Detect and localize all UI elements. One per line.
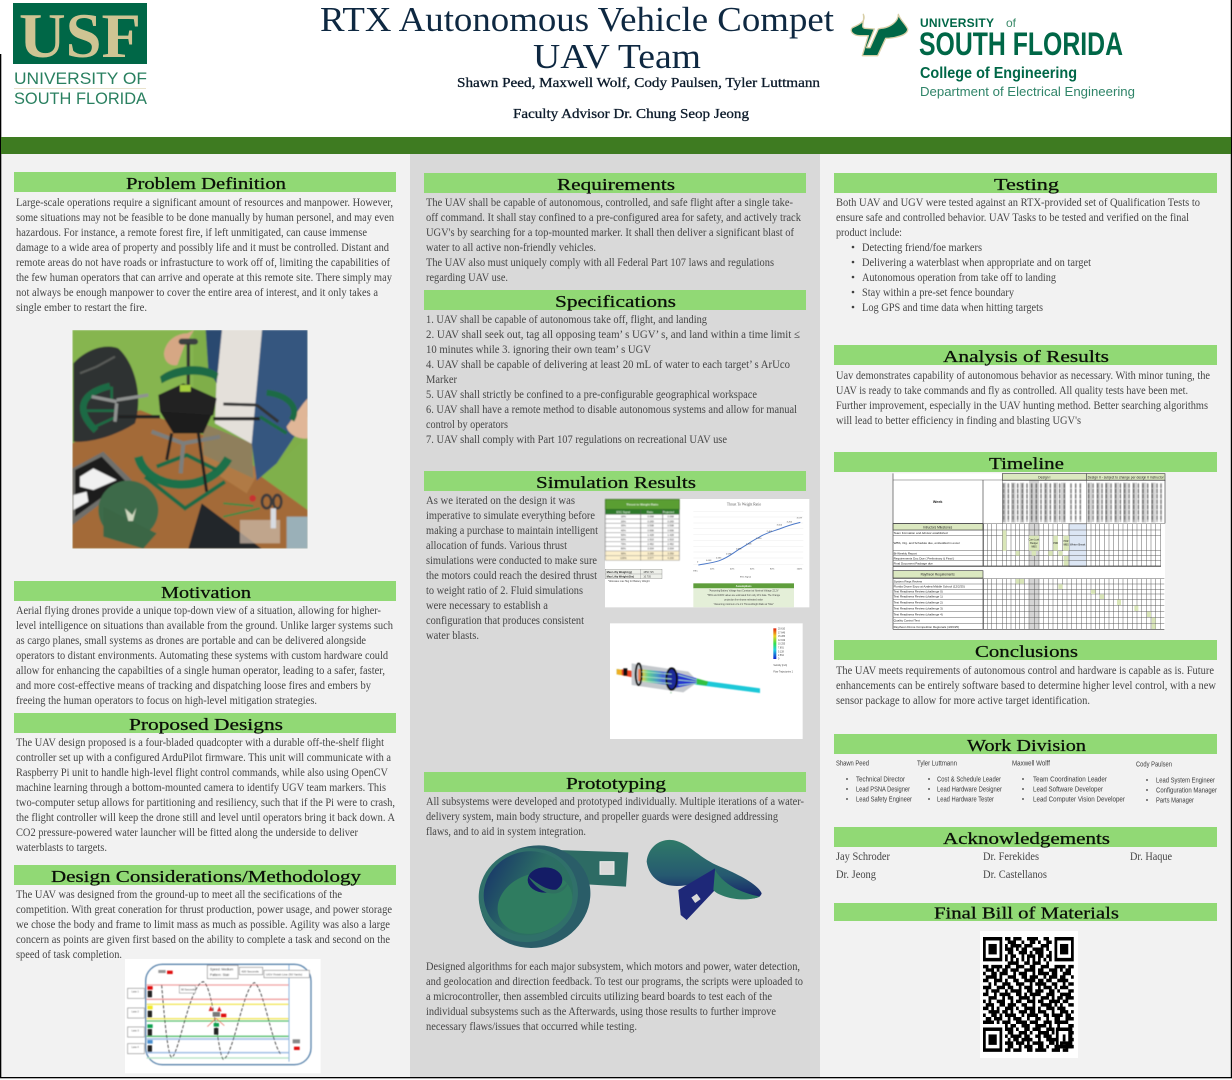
photo: quadcopter on table [72, 330, 308, 549]
table: thrust to weight: 3.577 [648, 557, 654, 560]
testing bullet list: Detecting friend/foe markers [862, 242, 982, 254]
panel: conclusions: sensor package to allow for more active target identification. [836, 695, 1090, 707]
testing bullet list [852, 242, 1092, 314]
QR code [980, 931, 1078, 1058]
line chart: 80% [770, 568, 774, 570]
max lift table: 4856.725 [643, 571, 654, 574]
panel: simulation results: As we iterated on the design it was [426, 495, 575, 507]
line chart: 3.265 [787, 522, 793, 524]
team member: Cody Paulsen: Parts Manager [1156, 798, 1195, 804]
panel: proposed designs: waterblasts to targets. [16, 842, 107, 854]
gantt grid lines [893, 473, 1165, 629]
panel: simulation results: Simulation Results [536, 473, 696, 492]
max lift table [605, 569, 662, 583]
assumptions box: *Assuming Battery Voltage kept Constant at Nominal Voltage 22.2V [709, 590, 779, 593]
figure: CFD flow simulation [610, 623, 803, 739]
diagram: competition lanes and flight path: 90 Seconds [181, 987, 196, 991]
panel: analysis of results: UAV is ready to take commands and fly as controlled. All quality tests have been met. [836, 385, 1188, 397]
text: development process: and geolocation and direction feedback. To test our programs, the scripts were uploaded to [426, 976, 803, 988]
gantt milestones: Test Readiness Review (challenge 3) [894, 607, 943, 611]
panel: proposed designs [14, 713, 396, 854]
panel: problem definition: the few human operators that can arrive and operate at this remote site. There simply may [16, 272, 392, 284]
table: thrust to weight: 80% [621, 548, 627, 551]
table: thrust to weight: 0.996 [648, 529, 654, 532]
team member: Shawn Peed: Lead Safety Engineer [856, 796, 913, 804]
line chart: 40% [730, 568, 734, 570]
panel: proposed designs: two-computer setup allows for partitioning and resiliency, such that if the Pi were to crash, [16, 797, 395, 809]
team member: Shawn Peed [836, 760, 913, 804]
panel: specifications: 6. UAV shall have a remote method to disable autonomous systems and allow for manual [426, 404, 797, 416]
panel: requirements: off command. It shall stay confined to a pre-configured area for safety, and actively track [426, 212, 801, 224]
line chart: 0 [697, 561, 699, 563]
panel: problem definition [14, 172, 396, 314]
table: thrust to weight: 100% [620, 557, 627, 560]
table: thrust to weight: 2.462 [668, 543, 674, 546]
green header band [1, 137, 1231, 154]
gantt milestones: Requirements Doc Due ( Preliminary & Final ) [894, 556, 954, 560]
panel: proposed designs: CO2 pressure-powered water launcher will be fitted along the underside to deliver [16, 827, 358, 839]
panel: acknowledgements: Jay Schroder [836, 851, 890, 863]
max lift table: Max Lifty Weight (g) [607, 570, 632, 574]
panel: acknowledgements: Acknowledgements [943, 829, 1110, 848]
diagram: competition lanes and flight path: Lane 3 [132, 1030, 139, 1032]
gantt milestones: System Reqs Review [894, 579, 923, 583]
panel: proposed designs: the flight controller will keep the drone still and level until operators bring it back down. A [16, 812, 396, 824]
figure: CAD models of water blaster [465, 830, 762, 963]
assumptions box: Assumptions [736, 585, 752, 588]
panel: specifications: control by operators [426, 419, 508, 431]
gantt milestones: Team Formation and Advisor established [894, 531, 948, 535]
team member: Maxwell Wolff: Lead Computer Vision Developer [1033, 796, 1126, 804]
authors: Shawn Peed, Maxwell Wolf, Cody Paulsen, Tyler Luttmann [457, 75, 820, 90]
table: thrust to weight: 1.910 [648, 539, 654, 542]
gantt milestones: Intructors Milestones [923, 525, 953, 529]
panel: analysis of results: will lead to better efficiency in finding and blasting UGV's [836, 415, 1081, 427]
gantt milestones: Test Readiness Review (challenge 2) [894, 601, 943, 605]
team member: Maxwell Wolff: Team Coordination Leader [1033, 776, 1108, 784]
panel: simulation results: configuration that produces consistent [426, 615, 585, 627]
gantt design headers: Design II - subject to change per design II instructor [1088, 475, 1165, 479]
diagram: competition lanes and flight path: Lane 2 [132, 1011, 139, 1013]
panel: work division: Work Division [967, 736, 1087, 755]
gantt milestones: WBS [1063, 544, 1069, 546]
table: thrust to weight: 3.350 [668, 552, 674, 555]
panel: analysis of results [834, 345, 1217, 427]
team member: Tyler Luttmann: Cost & Schedule Leader [937, 776, 1002, 784]
table: thrust to weight: Ratio [647, 510, 654, 514]
panel: proposed designs: Proposed Designs [129, 715, 283, 734]
panel: prototyping: flaws, and to aid in system integration. [426, 826, 586, 838]
panel: design considerations: speed of task completion. [16, 949, 122, 961]
panel: specifications: 4. UAV shall be capable of delivering at least 20 mL of water to each target’ s ArUco [426, 359, 790, 371]
table: thrust to weight: 3.004 [668, 548, 674, 551]
panel: requirements: Requirements [557, 175, 675, 194]
table: thrust to weight: 70% [621, 543, 627, 546]
team member: Tyler Luttmann: Lead Hardware Tester [937, 796, 995, 804]
line chart: 3.004 [777, 525, 783, 527]
table: thrust to weight: 30% [621, 525, 627, 528]
team member: Cody Paulsen [1136, 762, 1218, 804]
panel: requirements [424, 173, 806, 284]
panel: prototyping: delivery system, main body structure, and propeller guards were designed addressing [426, 811, 778, 823]
panel: acknowledgements: Dr. Haque [1130, 851, 1172, 863]
panel: simulation results: making a purchase to maintain intelligent [426, 525, 599, 537]
assumptions box: *80% and 100% values are estimated from only 21V data. The Orange [707, 594, 781, 597]
colour scale legend: 17.646 [778, 632, 786, 634]
table: thrust to weight: 0.996 [668, 529, 674, 532]
table: thrust to weight: 10% [621, 516, 627, 519]
line chart: 1.910 [756, 538, 762, 540]
panel: design considerations [14, 865, 396, 961]
logo: USF College of Engineering: UNIVERSITY [920, 16, 994, 30]
table: thrust to weight: 0.068 [668, 516, 674, 519]
panel: timeline heading [834, 452, 1217, 473]
diagram: competition lanes and flight path: Speed: Medium [210, 968, 234, 972]
colour scale legend: 12.919 [778, 640, 786, 642]
table: thrust to weight: 40% [621, 529, 627, 532]
panel: testing: ensure safe and controlled behavior. UAV Tasks to be tested and verified on the final [836, 212, 1189, 224]
team member: Maxwell Wolff: Maxwell Wolff [1012, 760, 1050, 768]
panel: requirements: UGV's by searching for a top-mounted marker. It shall then deliver a significant blast of [426, 227, 794, 239]
panel: motivation: and more cost-effective means of tracking and dispatching loose fires and embers by [16, 680, 371, 692]
line chart: Thrust To Weight Ratio [727, 503, 761, 507]
line chart: 0.996 [736, 549, 742, 551]
panel: testing: Testing [994, 175, 1060, 194]
panel: design considerations: we chose the body and frame to limit mass as much as possible. Agility was also a large [16, 919, 390, 931]
table: thrust to weight: 4.200 [668, 557, 674, 560]
colour scale legend [773, 628, 794, 674]
panel: problem definition: damage to a wide area of property and possibly life and it must be controlled. Distant and [16, 242, 389, 254]
gantt milestones: Budget [1030, 542, 1038, 545]
table: thrust to weight: 1.910 [668, 539, 674, 542]
nozzle model [647, 840, 762, 920]
panel: motivation: as cargo planes, small systems as drones are portable and can be delivered alongside [16, 635, 366, 647]
gantt design headers: Design I [1038, 476, 1051, 480]
panel: motivation: allow for enhancing the capabilties of a single human operator, leading to a safer, faster, [16, 665, 385, 677]
panel: conclusions: Conclusions [975, 642, 1078, 661]
water bowl model [465, 830, 628, 963]
line chart: 0.265 [716, 558, 722, 560]
panel: specifications: Specifications [555, 292, 676, 311]
colour scale legend: 2.564 [778, 655, 785, 657]
gantt milestones: WBS [1031, 546, 1037, 548]
logo: bull icon [851, 14, 908, 56]
diagram: competition lanes and flight path: UGV Finish Line (50 Yards) [266, 972, 302, 976]
assumptions box: projection line shows estimated value [724, 598, 764, 601]
panel: simulation results: to weight ratio of 2. Fluid simulations [426, 585, 583, 597]
max lift table: Max Lifty Weight (lbs) [607, 575, 634, 579]
text: development process: Designed algorithms for each major subsystem, which motors and power, water detection, [426, 961, 800, 973]
figure: CFD flow simulation: + [670, 691, 672, 695]
logo: USF University of South Florida [13, 0, 148, 108]
gantt milestones: Test Readiness Review (challenge 0) [894, 589, 943, 593]
colour scale legend: Velocity [m/s] [773, 664, 787, 667]
panel: problem definition: some situations may not be feasible to be done manually by human personel, and may even [16, 212, 394, 224]
panel: motivation: level intelligence on situations than available from the ground. Unlike larger systems such [16, 620, 393, 632]
panel: specifications: 7. UAV shall comply with Part 107 regulations on recreational UAV use [426, 434, 727, 446]
gantt milestones: Test Readiness Review (challenge 4) [894, 613, 943, 617]
diagram: competition lanes and flight path: Lane 1 [132, 992, 139, 994]
panel: motivation: Motivation [161, 583, 252, 602]
table: thrust to weight: 1.428 [668, 534, 674, 537]
colour scale legend: 0 [778, 659, 780, 661]
table: thrust to weight: 0.265 [648, 520, 654, 523]
panel: specifications: 1. UAV shall be capable of autonomous take off, flight, and landing [426, 314, 707, 326]
team member: Cody Paulsen: Configuration Manager [1156, 788, 1218, 794]
panel: prototyping: All subsystems were developed and prototyped individually. Multiple iterations of a water- [426, 796, 804, 808]
line chart: 60% [750, 568, 754, 570]
gantt design headers [933, 474, 1165, 504]
diagram: competition lanes and flight path: Lane 4 [132, 1047, 139, 1049]
gantt milestones: Core Lunk [1029, 539, 1040, 542]
panel: conclusions [834, 640, 1217, 707]
assumptions box: *Assuming minimum of a 2:1 Thrust-Weight Ratio at "Max" [714, 603, 774, 606]
assumptions box [693, 583, 794, 607]
panel: acknowledgements: Dr. Castellanos [983, 869, 1047, 881]
panel: motivation: freeing the human operators to focus on high-level mitigation strategies. [16, 695, 317, 707]
text: development process: necessary flaws/issues that occurred while testing. [426, 1021, 637, 1033]
table: thrust to weight: 1.428 [648, 534, 654, 537]
panel: specifications [424, 290, 806, 446]
panel: simulation results: imperative to simulate everything before [426, 510, 595, 522]
panel: analysis of results: Analysis of Results [943, 347, 1109, 366]
colour scale legend: 10.255 [778, 644, 786, 646]
table: thrust to weight: 3.004 [648, 548, 654, 551]
max lift table: *Allocates max 5kg for Battery Weight [608, 580, 650, 583]
panel: problem definition: hazardous. For instance, a remote forest fire, if left unmitigated, can cause immense [16, 227, 367, 239]
title: RTX Autonomous Vehicle Compet [320, 0, 834, 39]
logo: USF College of Engineering: of [1006, 16, 1017, 30]
team member: Cody Paulsen: Cody Paulsen [1136, 762, 1172, 768]
panel: motivation: operators to distant environments. Automating these systems with custom hardware could [16, 650, 388, 662]
table: thrust to weight: 20% [621, 520, 627, 523]
gantt milestones: Raytheon Requirements [921, 573, 955, 577]
team member: Tyler Luttmann: Tyler Luttmann [917, 760, 957, 768]
gantt milestones: Raytheon Drone Competition Regionals (4/26/25) [894, 625, 959, 629]
panel: problem definition: Problem Definition [126, 174, 287, 193]
panel: requirements: The UAV shall be capable of autonomous, controlled, and safe flight after a single take- [426, 197, 793, 209]
team member: Cody Paulsen: Lead System Engineer [1156, 778, 1216, 784]
panel: final bill of materials heading [834, 903, 1217, 923]
gantt milestones: Florida Drone Expo at Azalea Middle School (12/2/25) [894, 584, 965, 588]
panel: specifications: 5. UAV shall strictly be confined to a pre-configurable geographical workspace [426, 389, 757, 401]
panel: requirements: water to all active non-friendly vehicles. [426, 242, 596, 254]
colour scale legend: 5.128 [778, 651, 785, 653]
panel: proposed designs: controller set up with a configured ArduPilot firmware. This unit will communicate with a [16, 752, 391, 764]
panel: work division [834, 734, 1218, 804]
panel: design considerations: competition. With great coneration for thrust production, power usage, and power storage [16, 904, 392, 916]
logo: USF College of Engineering [919, 16, 1135, 99]
gantt milestones: PDR [1064, 541, 1069, 543]
table: thrust to weight: 0.265 [668, 520, 674, 523]
panel: acknowledgements [834, 827, 1217, 881]
gantt milestones: Winter Break [1070, 542, 1086, 546]
panel: requirements: The UAV also must uniquely comply with all Federal Part 107 laws and regulations [426, 257, 774, 269]
panel: problem definition: remote areas do not have roads or infrastucture to work off of, limiting the capabilities of [16, 257, 390, 269]
table: thrust to weight: Thrust to Weight Ratio [626, 503, 658, 507]
testing bullet list: Log GPS and time data when hitting targets [862, 302, 1043, 314]
text: development process: individual subsystems such as the Afterwards, using those results to further improve [426, 1006, 776, 1018]
gantt shaded columns [1002, 480, 1161, 629]
gantt milestones [893, 524, 1156, 629]
max lift table: 10.705 [643, 576, 652, 579]
logo: USF College of Engineering: College of Engineering [920, 65, 1077, 82]
panel: proposed designs: machine learning through a bottom-mounted camera to identify UGV team markers. This [16, 782, 386, 794]
panel: design considerations: The UAV was designed from the ground-up to meet all the secifications of the [16, 889, 342, 901]
table: thrust to weight: 2.462 [648, 543, 654, 546]
panel: testing: product include: [836, 227, 902, 239]
gantt milestones: WBS, Org. and Schedule due, embedded in excel [894, 541, 960, 545]
panel: specifications: 2. UAV shall seek out, tag all opposing team’ s UGV’ s, and land within a time limit ≤ [426, 329, 800, 341]
panel: proposed designs: The UAV design proposed is a four-bladed quadcopter with a durable off-the-shelf flight [16, 737, 385, 749]
faculty advisor: Faculty Advisor Dr. Chung Seop Jeong [513, 106, 749, 121]
gantt milestones: Quality Control Test [894, 619, 920, 623]
table: thrust to weight [605, 499, 679, 560]
panel: simulation results: the motors could reach the desired thrust [426, 570, 598, 582]
logo: USF University of South Florida: UNIVERSITY OF [14, 69, 147, 88]
line chart [693, 503, 803, 578]
panel: simulation results [424, 471, 806, 642]
panel: simulation results: water blasts. [426, 630, 479, 642]
panel: proposed designs: Raspberry Pi unit to handle high-level flight control commands, while also using OpenCV [16, 767, 389, 779]
panel: testing: Both UAV and UGV were tested against an RTX-provided set of Qualification Tests to [836, 197, 1200, 209]
line chart: ESC [693, 571, 698, 573]
table: thrust to weight: 0.598 [668, 525, 674, 528]
diagram: competition lanes and flight path: 420 Seconds [241, 969, 259, 973]
panel: motivation: Aerial flying drones provide a unique top-down view of a situation, allowing for higher- [16, 605, 381, 617]
line chart: 0.068 [706, 560, 712, 562]
line chart: 2.462 [767, 531, 773, 533]
colour scale legend: Flow Trajectories 1 [773, 671, 794, 674]
line chart: 1.428 [746, 543, 752, 545]
line chart: ESC Signal [740, 576, 752, 578]
gantt milestones: PDR [1053, 543, 1058, 545]
team member: Shawn Peed: Shawn Peed [836, 760, 869, 768]
panel: final bill of materials heading: Final Bill of Materials [934, 904, 1119, 923]
chart: project timeline gantt [893, 473, 1165, 630]
team member: Tyler Luttmann [917, 760, 1003, 804]
table: thrust to weight: Projected [663, 510, 674, 514]
line chart: 100% [797, 568, 802, 570]
diagram: competition lanes and flight path: Pattern: Stair [210, 973, 230, 977]
gantt design headers: Week [933, 500, 943, 504]
logo: USF College of Engineering: Department of Electrical Engineering [920, 84, 1135, 99]
colour scale legend: 15.283 [778, 636, 786, 638]
line chart: 0.598 [726, 553, 732, 555]
team member: Tyler Luttmann: Lead Hardware Designer [937, 786, 1003, 794]
panel: prototyping [424, 772, 806, 838]
gantt milestones: Final Document Package due [894, 562, 933, 566]
title [320, 0, 834, 76]
table: thrust to weight: 90% [621, 552, 627, 555]
panel: acknowledgements: Dr. Jeong [836, 869, 876, 881]
line chart: 3.577 [797, 518, 803, 520]
panel: problem definition: Large-scale operations require a significant amount of resources and manpower. However, [16, 197, 393, 209]
logo: USF University of South Florida: SOUTH FLORIDA [14, 89, 148, 108]
line chart: 20% [710, 568, 714, 570]
panel: design considerations: concern as points are given first based on the ability to complete a task and second on the [16, 934, 390, 946]
logo: USF University of South Florida: USF [19, 0, 141, 71]
text: development process: a microcontroller, then assembled circuits utilizing beard boards to test each of the [426, 991, 772, 1003]
title: UAV Team [533, 37, 701, 76]
table: thrust to weight: 60% [621, 539, 627, 542]
panel: simulation results: allocation of funds. Various thrust [426, 540, 568, 552]
chart: thrust to weight ratio [605, 499, 809, 607]
table: thrust to weight: 0.598 [648, 525, 654, 528]
colour scale legend: 20.610 [778, 629, 786, 631]
gantt milestones: Test Readiness Review (challenge 1) [894, 595, 943, 599]
team member: Shawn Peed: Lead PSNA Designer [856, 786, 911, 794]
testing bullet list: Delivering a waterblast when appropriate and on target [862, 257, 1092, 269]
table: thrust to weight: 50% [621, 534, 627, 537]
panel: motivation [14, 581, 396, 707]
panel: specifications: Marker [426, 374, 457, 386]
panel: specifications: 10 minutes while 3. ignoring their own team’ s UGV [426, 344, 652, 356]
diagram: competition lanes and flight path [125, 959, 321, 1073]
panel: simulation results: simulations were conducted to make sure [426, 555, 597, 567]
gantt milestones: Bi-Weekly Report [894, 551, 917, 555]
panel: prototyping: Prototyping [566, 774, 667, 793]
text: development process [426, 961, 803, 1033]
table: thrust to weight: 0.068 [648, 516, 654, 519]
panel: timeline heading: Timeline [989, 454, 1064, 473]
panel: testing [834, 173, 1217, 314]
table: thrust to weight: 3.265 [648, 552, 654, 555]
panel: requirements: regarding UAV use. [426, 272, 508, 284]
colour scale legend: 7.691 [778, 648, 785, 650]
panel: problem definition: single ember to restart the fire. [16, 302, 147, 314]
panel: acknowledgements: Dr. Ferekides [983, 851, 1039, 863]
logo: USF College of Engineering: SOUTH FLORIDA [919, 26, 1123, 62]
testing bullet list: Stay within a pre-set fence boundary [862, 287, 1014, 299]
testing bullet list: Autonomous operation from take off to landing [862, 272, 1056, 284]
team member: Maxwell Wolff [1012, 760, 1126, 804]
panel: problem definition: not always be enough manpower to cover the entire area of interest, and it only takes a [16, 287, 378, 299]
panel: simulation results: were necessary to establish a [426, 600, 548, 612]
table: thrust to weight: ESC Signal [617, 510, 631, 514]
team member: Shawn Peed: Technical Director [856, 776, 906, 784]
panel: design considerations: Design Considerations/Methodology [51, 867, 362, 886]
team member: Maxwell Wolff: Lead Software Developer [1033, 786, 1104, 794]
